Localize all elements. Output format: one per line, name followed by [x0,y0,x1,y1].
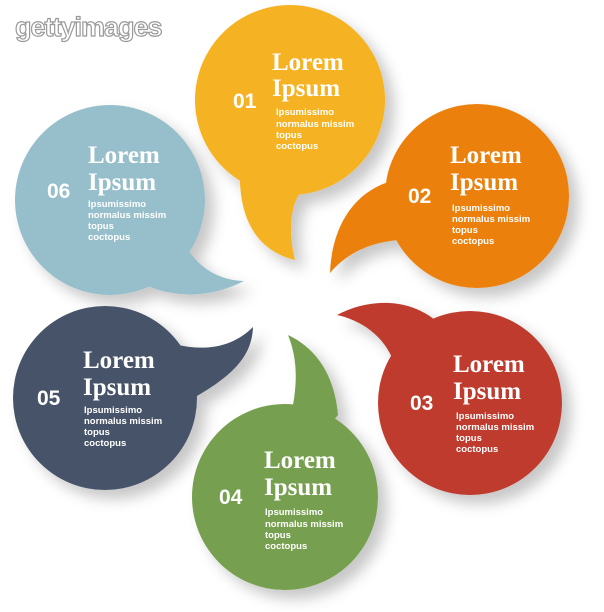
bubble 03: Lorem [453,351,525,378]
bubble 03 [337,303,562,495]
watermark: gettyimages [15,12,162,42]
bubble 04: topus [265,530,291,541]
bubble 05: Lorem [83,347,155,374]
bubble 01 [195,5,385,260]
bubble 02: 02 [408,185,431,208]
bubble 06: coctopus [88,232,130,243]
bubble 01: Ipsum [272,75,340,102]
bubble 03: topus [456,433,482,444]
bubble 06: Ipsumissimo [88,199,146,210]
bubble 05: coctopus [84,438,126,449]
bubble 05: Ipsumissimo [84,405,142,416]
bubble 06: Ipsum [88,169,156,196]
bubble 06: normalus missim [88,210,166,221]
bubble 06: topus [88,221,114,232]
bubble 04: normalus missim [265,519,343,530]
bubble 04: Lorem [264,447,336,474]
bubble 04: 04 [219,486,243,509]
bubble 02: Ipsumissimo [452,203,510,214]
bubble 01: Ipsumissimo [276,107,334,118]
bubble 03: 03 [410,392,433,415]
bubble 05: 05 [37,387,61,410]
bubble 03: Ipsum [453,378,521,405]
bubble 05: normalus missim [84,416,162,427]
bubble 01: Lorem [272,49,344,76]
bubble 05: topus [84,427,110,438]
bubble 04 [192,335,378,590]
bubble 02: topus [452,225,478,236]
bubble 05 [13,306,253,490]
bubble 06 [15,105,244,295]
bubble 03: normalus missim [456,422,534,433]
bubble 06: 06 [47,180,70,203]
bubble 01: coctopus [276,141,318,152]
bubble 04: Ipsum [264,474,332,501]
bubble 02: Lorem [450,142,522,169]
bubble 05: Ipsum [83,374,151,401]
bubble 06: Lorem [88,142,160,169]
bubble 04: coctopus [265,541,307,552]
bubble 01: topus [276,130,302,141]
bubble 01: normalus missim [276,119,354,130]
bubble 02 [330,104,569,288]
bubble 02: normalus missim [452,214,530,225]
bubble 02: coctopus [452,236,494,247]
bubble 03: Ipsumissimo [456,411,514,422]
bubble 03: coctopus [456,444,498,455]
bubble 04: Ipsumissimo [265,507,323,518]
bubble 01: 01 [233,90,257,113]
bubble 02: Ipsum [450,169,518,196]
